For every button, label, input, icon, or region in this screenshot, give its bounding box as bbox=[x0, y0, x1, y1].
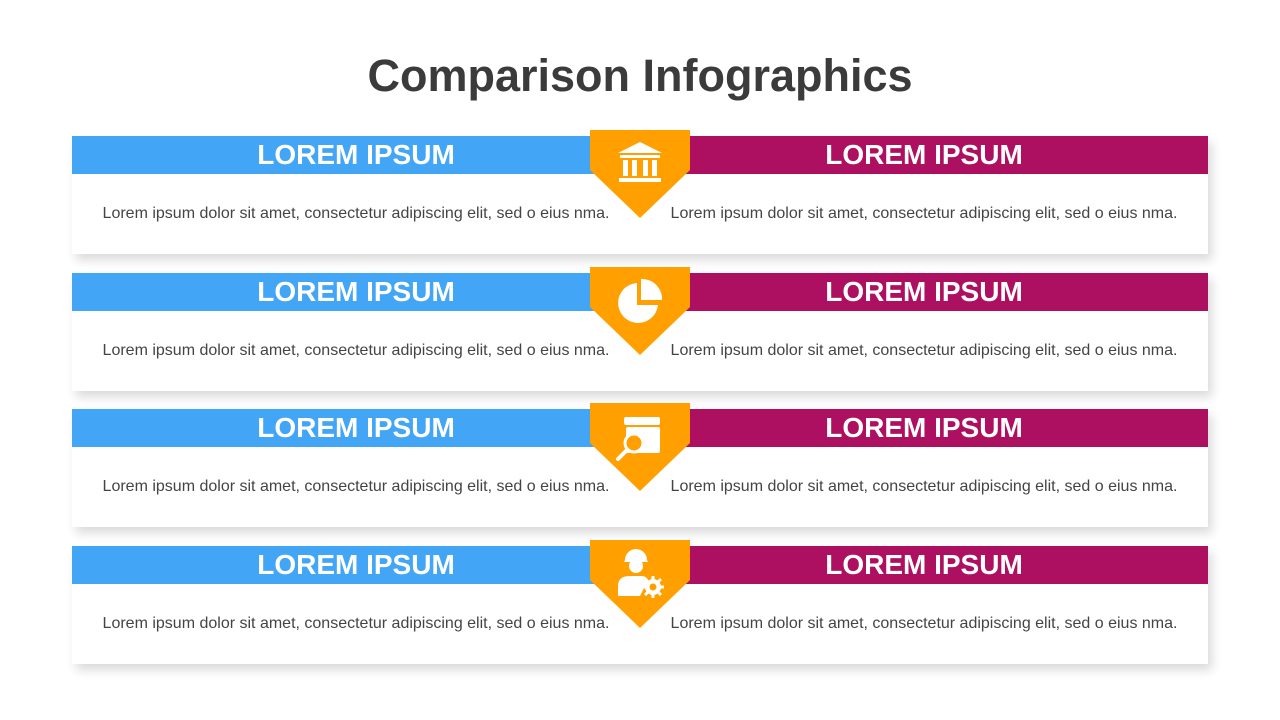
title: Comparison Infographics bbox=[367, 50, 913, 101]
left text: Lorem ipsum dolor sit amet, consectetur adipiscing elit, sed o eius nma. bbox=[103, 205, 609, 222]
right header bbox=[640, 546, 1208, 584]
left header: LOREM IPSUM bbox=[257, 549, 455, 580]
right header bbox=[640, 409, 1208, 447]
right header: LOREM IPSUM bbox=[825, 412, 1023, 443]
row 3 bbox=[72, 403, 1216, 537]
left text: Lorem ipsum dolor sit amet, consectetur adipiscing elit, sed o eius nma. bbox=[103, 478, 609, 495]
right header: LOREM IPSUM bbox=[825, 139, 1023, 170]
badge: pie chart icon bbox=[590, 267, 690, 355]
row 2 bbox=[72, 267, 1216, 401]
left header: LOREM IPSUM bbox=[257, 276, 455, 307]
right header: LOREM IPSUM bbox=[825, 549, 1023, 580]
left text: Lorem ipsum dolor sit amet, consectetur adipiscing elit, sed o eius nma. bbox=[103, 342, 609, 359]
left header: LOREM IPSUM bbox=[257, 412, 455, 443]
left header bbox=[72, 273, 640, 311]
right text: Lorem ipsum dolor sit amet, consectetur adipiscing elit, sed o eius nma. bbox=[671, 478, 1177, 495]
right text: Lorem ipsum dolor sit amet, consectetur adipiscing elit, sed o eius nma. bbox=[671, 615, 1177, 632]
right text: Lorem ipsum dolor sit amet, consectetur adipiscing elit, sed o eius nma. bbox=[671, 205, 1177, 222]
left header bbox=[72, 409, 640, 447]
right header bbox=[640, 273, 1208, 311]
badge: worker gear icon bbox=[590, 540, 690, 628]
right header bbox=[640, 136, 1208, 174]
row 1 bbox=[72, 130, 1216, 264]
left text: Lorem ipsum dolor sit amet, consectetur adipiscing elit, sed o eius nma. bbox=[103, 615, 609, 632]
badge: bank icon bbox=[590, 130, 690, 218]
badge: box search icon bbox=[590, 403, 690, 491]
left header bbox=[72, 546, 640, 584]
left header bbox=[72, 136, 640, 174]
row 4 bbox=[72, 540, 1216, 674]
right text: Lorem ipsum dolor sit amet, consectetur adipiscing elit, sed o eius nma. bbox=[671, 342, 1177, 359]
left header: LOREM IPSUM bbox=[257, 139, 455, 170]
right header: LOREM IPSUM bbox=[825, 276, 1023, 307]
